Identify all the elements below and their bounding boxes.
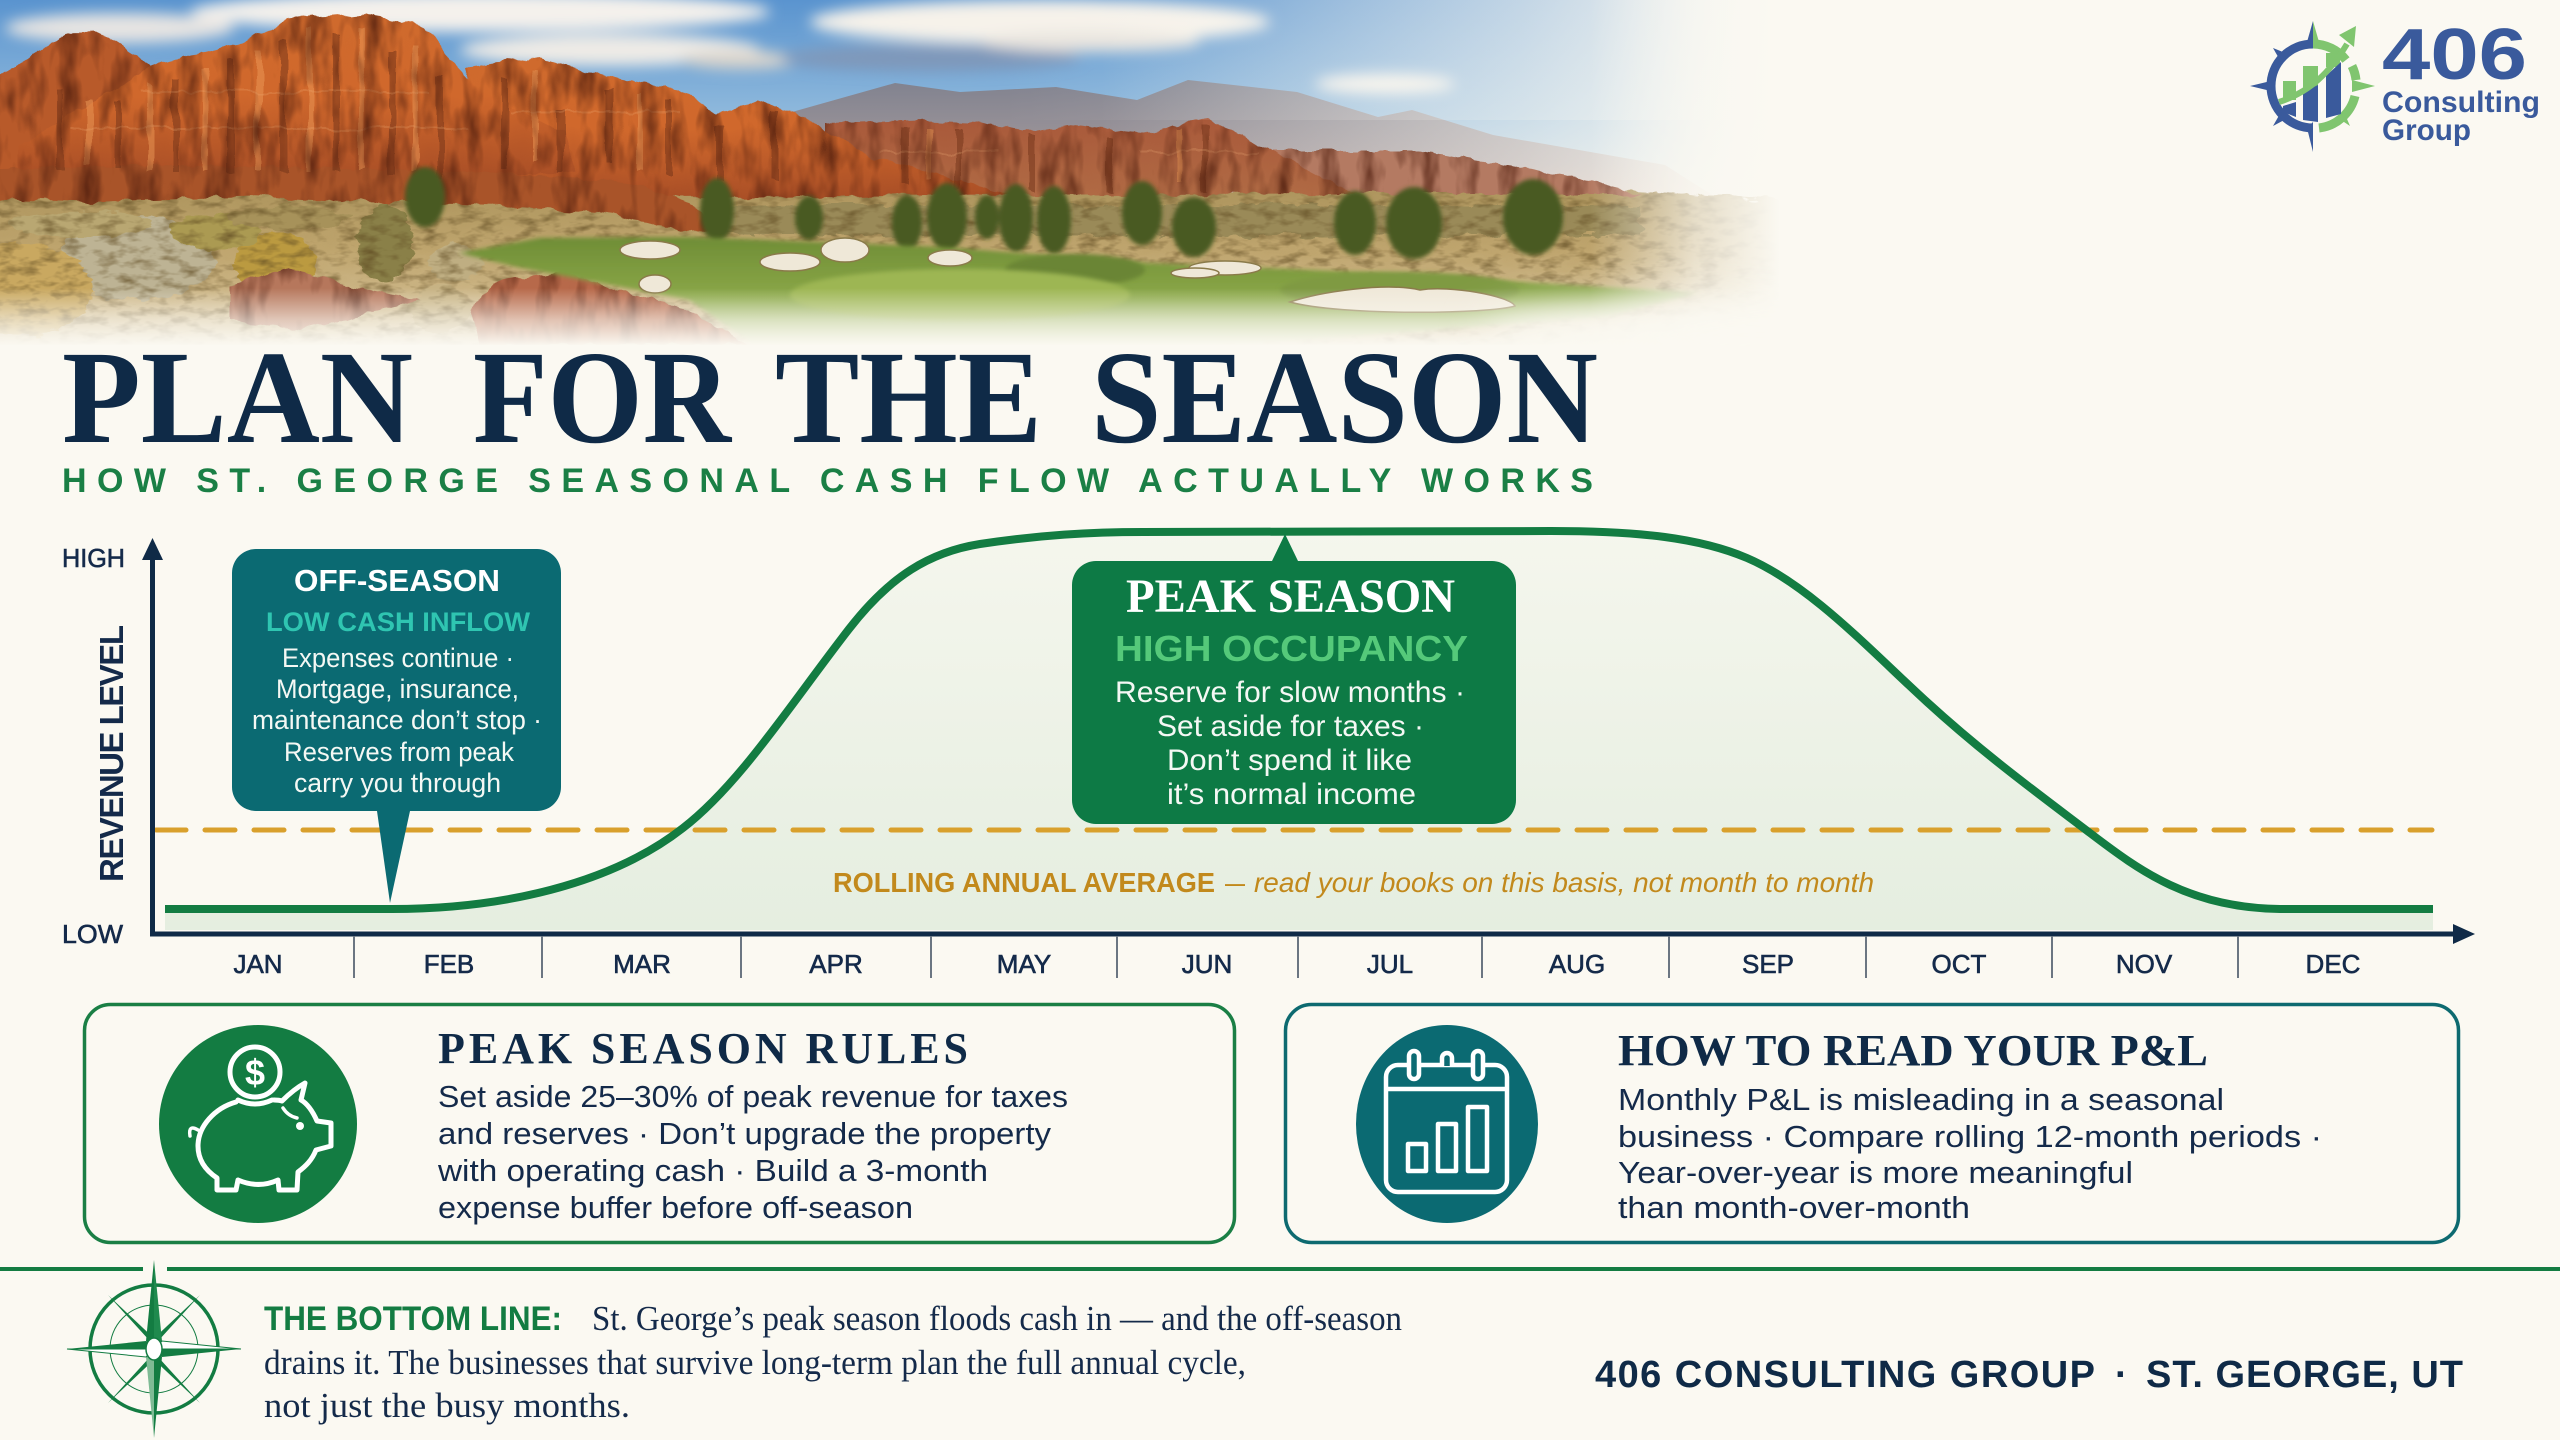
desert ground xyxy=(0,189,1766,342)
x axis xyxy=(150,924,2475,944)
panel body text: expense buffer before off-season xyxy=(438,1190,913,1225)
panel body text: Year-over-year is more meaningful xyxy=(1618,1155,2133,1190)
callout: off-season: carry you through xyxy=(294,768,501,798)
sand bunkers xyxy=(620,238,1515,312)
callout: peak season: HIGH OCCUPANCY xyxy=(1115,628,1468,669)
month labels: OCT xyxy=(1932,949,1987,979)
panel body text xyxy=(437,1079,1068,1225)
callout: off-season: LOW CASH INFLOW xyxy=(266,607,531,637)
y axis labels xyxy=(62,543,130,949)
logo compass mark xyxy=(2250,21,2375,152)
panel: peak season rules xyxy=(84,1004,1234,1242)
month labels: AUG xyxy=(1549,949,1605,979)
foreground brush xyxy=(0,205,1640,336)
footer credit xyxy=(1595,1354,2463,1396)
icon: piggy bank xyxy=(159,1025,357,1223)
month labels: SEP xyxy=(1742,949,1794,979)
golf course xyxy=(459,237,1699,348)
icon: piggy bank: $ xyxy=(245,1052,265,1093)
rolling average label: — xyxy=(1225,867,1245,898)
month labels: APR xyxy=(809,949,863,979)
panel heading: PEAK SEASON RULES xyxy=(438,1024,968,1073)
red rock formations xyxy=(0,13,1640,232)
callout: peak season: PEAK SEASON xyxy=(1126,570,1455,623)
month labels: MAY xyxy=(997,949,1051,979)
panel body text: business · Compare rolling 12-month periods · xyxy=(1618,1119,2322,1154)
y axis labels: HIGH xyxy=(62,543,125,573)
fade-out overlays xyxy=(0,0,2080,371)
callout: off-season: OFF-SEASON xyxy=(294,563,500,598)
subtitle: HOW ST. GEORGE SEASONAL CASH FLOW ACTUALLY WORKS xyxy=(62,462,1593,500)
month labels: NOV xyxy=(2116,949,2173,979)
rolling average label: ROLLING ANNUAL AVERAGE xyxy=(833,867,1215,898)
month labels: DEC xyxy=(2306,949,2360,979)
y axis labels: LOW xyxy=(62,919,123,949)
footer credit: ST. GEORGE, UT xyxy=(2146,1354,2463,1396)
panel body text: Monthly P&L is misleading in a seasonal xyxy=(1618,1082,2224,1117)
callout: off-season: maintenance don’t stop · xyxy=(252,705,542,735)
callout: peak season: Set aside for taxes · xyxy=(1157,710,1424,743)
logo wordmark xyxy=(2382,15,2540,147)
month labels: FEB xyxy=(424,949,474,979)
far mountains xyxy=(793,80,1658,193)
callout: off-season: Reserves from peak xyxy=(284,737,514,767)
lower red rocks xyxy=(230,268,746,345)
callout: off-season: Expenses continue · xyxy=(282,643,514,673)
callout: peak season xyxy=(1072,534,1516,824)
landscape hero image xyxy=(0,0,1766,344)
panel heading: HOW TO READ YOUR P&L xyxy=(1618,1026,2208,1075)
rolling average label: read your books on this basis, not month to month xyxy=(1254,867,1874,898)
small trees xyxy=(405,167,1563,259)
chart: seasonal revenue curve xyxy=(62,531,2475,979)
month labels: JAN xyxy=(233,949,283,979)
callout: peak season: Reserve for slow months · xyxy=(1115,676,1465,709)
footer credit: 406 CONSULTING GROUP xyxy=(1595,1354,2095,1396)
bottom line statement: St. George’s peak season floods cash in — and the off-season xyxy=(592,1299,1402,1338)
month labels: JUN xyxy=(1182,949,1232,979)
y axis labels: REVENUE LEVEL xyxy=(93,625,130,882)
panel: how to read your P&L xyxy=(1286,1004,2458,1242)
title: THE xyxy=(775,323,1042,471)
y axis xyxy=(142,538,163,934)
month labels: MAR xyxy=(613,949,671,979)
logo wordmark: 406 xyxy=(2382,15,2527,95)
panel body text: with operating cash · Build a 3-month xyxy=(437,1153,988,1188)
icon: calendar with bars xyxy=(1356,1025,1538,1223)
revenue curve line xyxy=(165,531,2433,909)
bottom line statement: drains it. The businesses that survive long-term plan the full annual cycle, xyxy=(264,1343,1246,1382)
logo: 406 Consulting Group xyxy=(2250,15,2540,152)
month labels: JUL xyxy=(1367,949,1413,979)
callout: peak season: Don’t spend it like xyxy=(1167,744,1412,777)
panel body text: Set aside 25–30% of peak revenue for taxes xyxy=(438,1079,1068,1114)
area under curve xyxy=(165,531,2433,930)
logo wordmark: Consulting xyxy=(2382,86,2540,119)
rolling average dashed line xyxy=(156,828,2432,832)
month ticks xyxy=(354,936,2238,978)
bottom line statement: not just the busy months. xyxy=(264,1386,630,1425)
title: FOR xyxy=(473,323,733,471)
callout: off-season xyxy=(232,549,561,903)
title: SEASON xyxy=(1091,323,1598,471)
bottom line statement: THE BOTTOM LINE: xyxy=(264,1300,562,1338)
panel body text xyxy=(1618,1082,2322,1225)
callout: off-season: Mortgage, insurance, xyxy=(276,674,519,704)
callout: peak season: it’s normal income xyxy=(1167,778,1416,811)
logo wordmark: Group xyxy=(2382,114,2471,147)
footer divider xyxy=(0,1267,2560,1271)
panel body text: and reserves · Don’t upgrade the property xyxy=(438,1116,1052,1151)
rolling average label xyxy=(833,867,1874,898)
bottom line statement xyxy=(264,1299,1402,1425)
title xyxy=(62,323,1598,471)
icon: compass rose xyxy=(67,1260,241,1438)
month labels xyxy=(233,949,2360,979)
title: PLAN xyxy=(62,323,413,471)
panel body text: than month-over-month xyxy=(1618,1190,1970,1225)
footer credit: · xyxy=(2115,1354,2128,1396)
